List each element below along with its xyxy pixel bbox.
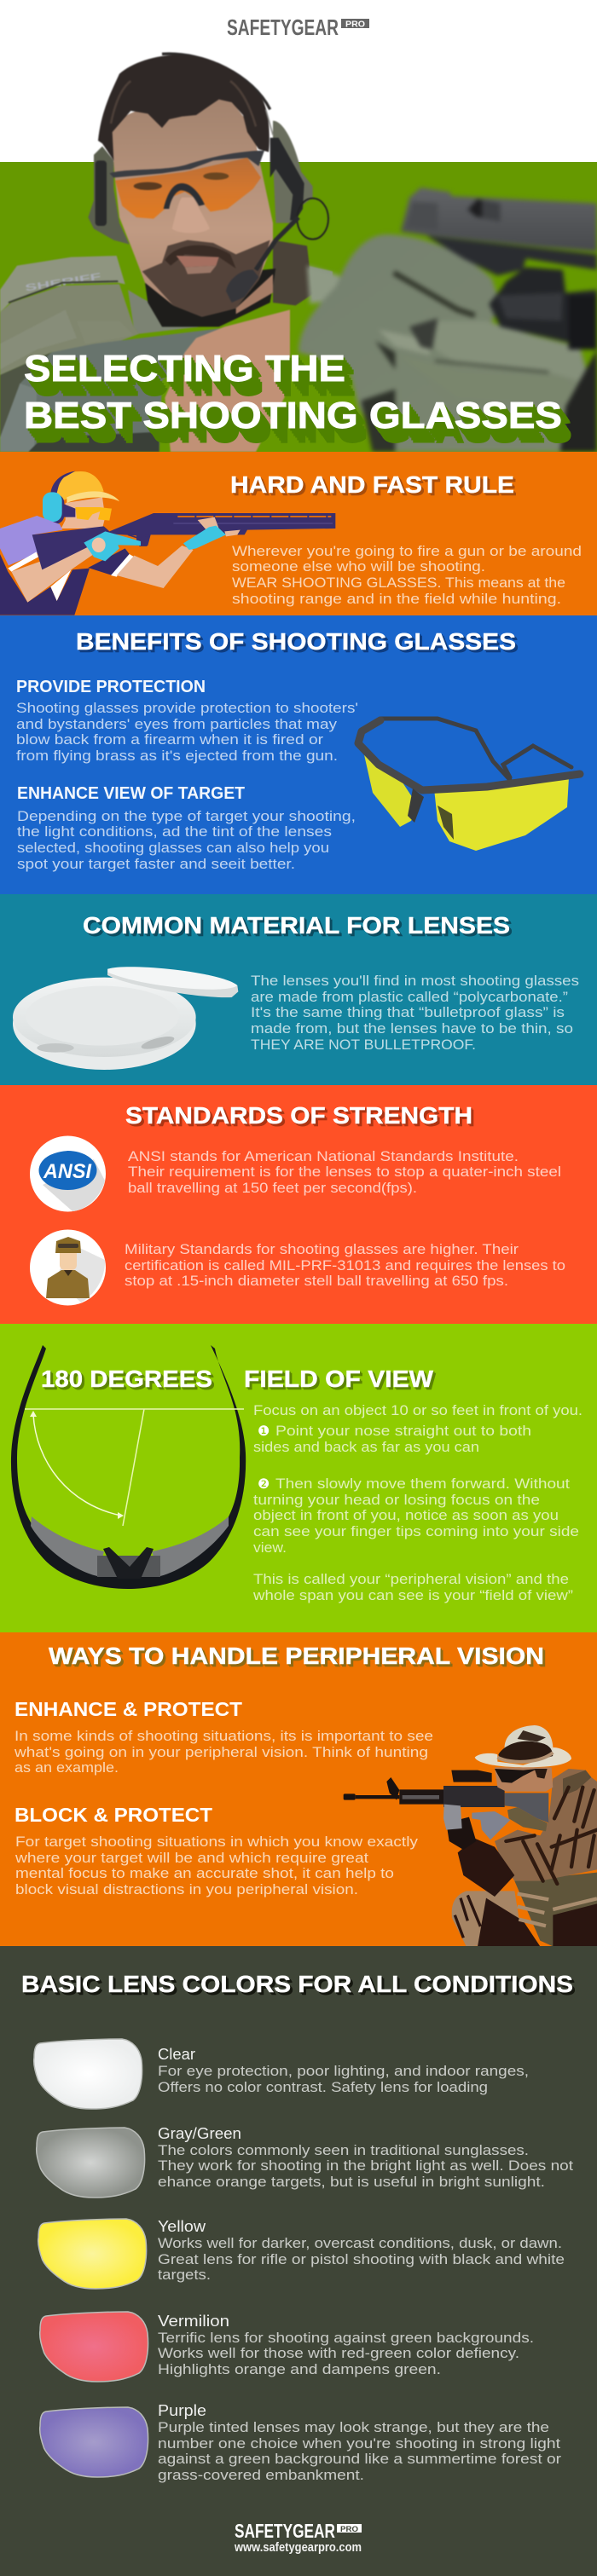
text block: enhance and protect: what's going on in your peripheral vision. Think of hunting	[14, 1744, 428, 1760]
item: purple lens text: grass-covered embankment.	[158, 2467, 364, 2483]
text block: block and protect: where your target will be and which require great	[14, 1850, 368, 1866]
item: clear lens text: Offers no color contrast. Safety lens for loading	[158, 2079, 488, 2095]
logo: Safety Gear Pro: SAFETYGEAR	[227, 14, 339, 40]
text block: peripheral vision instructions: This is called your “peripheral vision” and the	[253, 1571, 569, 1587]
item: vermilion lens text: Terrific lens for shooting against green backgrounds.	[158, 2330, 534, 2346]
icon: step two: ❷	[258, 1476, 270, 1492]
text block: ANSI standard: ball travelling at 150 feet per second(fps).	[128, 1180, 417, 1196]
item: purple lens text: Purple tinted lenses may look strange, but they are the	[158, 2419, 549, 2435]
panel: common material for lenses	[0, 894, 597, 1085]
icon: ANSI logo	[30, 1135, 106, 1212]
photo: man's head with orange glasses and headset	[88, 54, 333, 326]
item: yellow lens text	[158, 2218, 565, 2283]
text block: protection: from flying brass as it's ejected from the gun.	[16, 748, 338, 764]
text block: military standard: certification is called MIL-PRF-31013 and requires the lenses to	[125, 1257, 565, 1274]
item: vermilion lens text	[158, 2313, 534, 2377]
text block: wear shooting glasses: someone else who will be shooting.	[232, 558, 485, 575]
text block: polycarbonate: It's the same thing that “bulletproof glass” is	[251, 1004, 565, 1020]
text block: polycarbonate: THEY ARE NOT BULLETPROOF.	[251, 1037, 476, 1053]
icon: soldier	[30, 1229, 106, 1306]
text block: block and protect: For target shooting situations in which you know exactly	[15, 1834, 419, 1850]
lens: vermilion	[40, 2312, 148, 2382]
text block: enhance view: selected, shooting glasses can also help you	[17, 840, 329, 856]
panel: basic lens colors	[0, 1946, 597, 2576]
subheading: enhance and protect: ENHANCE & PROTECT	[14, 1698, 242, 1720]
lens: clear	[34, 2039, 142, 2109]
text block: peripheral vision instructions: sides and back as far as you can	[253, 1439, 479, 1455]
text block: ANSI standard: Their requirement is for the lenses to stop a quater-inch steel	[128, 1164, 561, 1180]
item: purple lens text: Purple	[158, 2402, 206, 2419]
logo: Safety Gear Pro: PRO	[345, 20, 365, 29]
lens: purple	[40, 2407, 148, 2477]
text block: enhance view: the light conditions, ad the tint of the lenses	[17, 823, 332, 840]
text block: block and protect: block visual distractions in you peripheral vision.	[15, 1881, 358, 1897]
panel: standards of strength	[0, 1085, 597, 1324]
panel: ways to handle peripheral vision	[0, 1632, 597, 1946]
text block: peripheral vision instructions: view.	[253, 1539, 287, 1556]
text block: ANSI standard: ANSI stands for American National Standards Institute.	[128, 1148, 519, 1164]
item: vermilion lens text: Works well for those with red-green color defiency.	[158, 2345, 519, 2361]
text block: protection	[16, 700, 358, 764]
subheading: provide protection: PROVIDE PROTECTION	[16, 678, 206, 696]
lens: yellow	[38, 2219, 147, 2289]
text block: wear shooting glasses	[232, 543, 582, 607]
diagram: glasses top view with 180 degree arc	[11, 1345, 246, 1589]
heading: benefits: BENEFITS OF SHOOTING GLASSES	[76, 628, 516, 655]
text block: wear shooting glasses: WEAR SHOOTING GLASSES. This means at the	[232, 575, 565, 591]
heading: field of view: FIELD OF VIEW	[244, 1366, 434, 1392]
title	[24, 348, 562, 436]
text block: protection: and bystanders' eyes from particles that may	[16, 716, 338, 732]
text block: peripheral vision instructions: Then slowly move them forward. Without	[275, 1476, 570, 1492]
illustration: kneeling rifleman	[344, 1725, 597, 1946]
icon: step one: ❶	[258, 1423, 270, 1439]
heading: hard and fast rule: HARD AND FAST RULE	[230, 471, 514, 498]
text block: military standard: stop at .15-inch diameter stell ball travelling at 650 fps.	[125, 1273, 508, 1289]
item: clear lens text: For eye protection, poor lighting, and indoor ranges,	[158, 2063, 529, 2079]
item: yellow lens text: Yellow	[158, 2218, 206, 2235]
item: purple lens text	[158, 2402, 561, 2483]
footer logo and website: SAFETYGEAR	[235, 2520, 335, 2542]
item: purple lens text: number one choice when you're shooting in strong light	[158, 2435, 560, 2452]
text block: peripheral vision instructions: object in front of you, notice as soon as you	[253, 1507, 559, 1523]
text block: block and protect	[14, 1834, 419, 1897]
item: purple lens text: against a green background like a summertime forest or	[158, 2451, 561, 2467]
item: gray green lens text: They work for shooting in the bright light as well. Does not	[158, 2157, 573, 2174]
lens: gray green	[37, 2128, 145, 2198]
text block: protection: blow back from a firearm when it is fired or	[16, 731, 323, 748]
text block: peripheral vision instructions: whole span you can see is your “field of view”	[252, 1587, 573, 1603]
text block: enhance view: Depending on the type of target your shooting,	[17, 808, 356, 824]
text block: military standard	[125, 1241, 565, 1289]
item: gray green lens text	[158, 2125, 573, 2190]
heading: standards: STANDARDS OF STRENGTH	[125, 1102, 472, 1129]
photo: vest, shoulder and forearm	[0, 256, 290, 452]
panel: hard and fast rule	[0, 452, 597, 615]
text block: wear shooting glasses: shooting range and in the field while hunting.	[232, 591, 561, 607]
item: clear lens text	[158, 2046, 529, 2095]
text block: enhance view: spot your target faster and seeit better.	[17, 856, 295, 872]
item: gray green lens text: ehance orange targets, but is useful in bright sunlight.	[158, 2174, 545, 2190]
text block: enhance and protect: In some kinds of shooting situations, its is important to see	[14, 1728, 433, 1744]
text block: ANSI standard	[128, 1148, 561, 1196]
panel: hero photo of shooter	[0, 54, 597, 452]
text block: enhance and protect: as an example.	[14, 1759, 119, 1776]
text block: peripheral vision instructions	[252, 1402, 583, 1603]
title: BEST SHOOTING GLASSES	[24, 395, 562, 436]
heading: basic lens colors: BASIC LENS COLORS FOR ALL CONDITIONS	[21, 1971, 573, 1997]
item: gray green lens text: The colors commonly seen in traditional sunglasses.	[158, 2142, 529, 2158]
text block: polycarbonate: The lenses you'll find in most shooting glasses	[251, 973, 579, 989]
text block: peripheral vision instructions: Focus on an object 10 or so feet in front of you.	[253, 1402, 583, 1418]
title: SELECTING THE	[24, 348, 345, 390]
illustration: trap shooter with shotgun	[0, 471, 335, 615]
photo: gloved hand gripping pistol	[298, 188, 597, 452]
footer logo and website	[234, 2520, 362, 2555]
text block: peripheral vision instructions: turning your head or losing focus on the	[253, 1492, 540, 1508]
text block: peripheral vision instructions: can see your finger tips coming into your side	[253, 1523, 579, 1539]
item: gray green lens text: Gray/Green	[158, 2125, 241, 2142]
text block: block and protect: mental focus to make an accurate shot, it can help to	[15, 1865, 394, 1881]
subheading: enhance view of target: ENHANCE VIEW OF TARGET	[17, 784, 245, 803]
text block: polycarbonate	[251, 973, 579, 1053]
item: vermilion lens text: Vermilion	[158, 2313, 229, 2330]
item: clear lens text: Clear	[158, 2046, 195, 2063]
text block: military standard: Military Standards for shooting glasses are higher. Their	[125, 1241, 519, 1257]
item: yellow lens text: Works well for darker, overcast conditions, dusk, or dawn.	[158, 2235, 562, 2251]
text block: polycarbonate: are made from plastic called “polycarbonate.”	[251, 989, 568, 1005]
panel: benefits of shooting glasses	[0, 615, 597, 894]
image: polycarbonate lens discs	[13, 967, 238, 1070]
heading: common material: COMMON MATERIAL FOR LENSES	[83, 912, 510, 939]
image: yellow shooting glasses	[358, 719, 580, 851]
heading: 180 degrees: 180 DEGREES	[41, 1366, 212, 1392]
panel: header	[0, 0, 597, 162]
text block: wear shooting glasses: Wherever you're going to fire a gun or be around	[232, 543, 582, 559]
item: yellow lens text: targets.	[158, 2267, 211, 2283]
text block: polycarbonate: made from, but the lenses have to be thin, so	[251, 1020, 573, 1037]
item: vermilion lens text: Highlights orange and dampens green.	[158, 2361, 441, 2377]
text block: enhance and protect	[14, 1728, 433, 1776]
footer logo and website: PRO	[340, 2525, 358, 2533]
text block: enhance view	[17, 808, 356, 872]
subheading: block and protect: BLOCK & PROTECT	[14, 1804, 212, 1826]
icon: ANSI logo: ANSI	[43, 1160, 92, 1183]
panel: field of view	[0, 1324, 597, 1632]
heading: ways to handle: WAYS TO HANDLE PERIPHERAL VISION	[49, 1643, 544, 1669]
text block: peripheral vision instructions: Point your nose straight out to both	[275, 1423, 531, 1439]
text block: protection: Shooting glasses provide protection to shooters'	[16, 700, 358, 716]
item: yellow lens text: Great lens for rifle or pistol shooting with black and white	[158, 2251, 565, 2267]
footer logo and website: www.safetygearpro.com	[234, 2540, 362, 2555]
photo: vest, shoulder and forearm: SHERIFF	[25, 272, 101, 294]
